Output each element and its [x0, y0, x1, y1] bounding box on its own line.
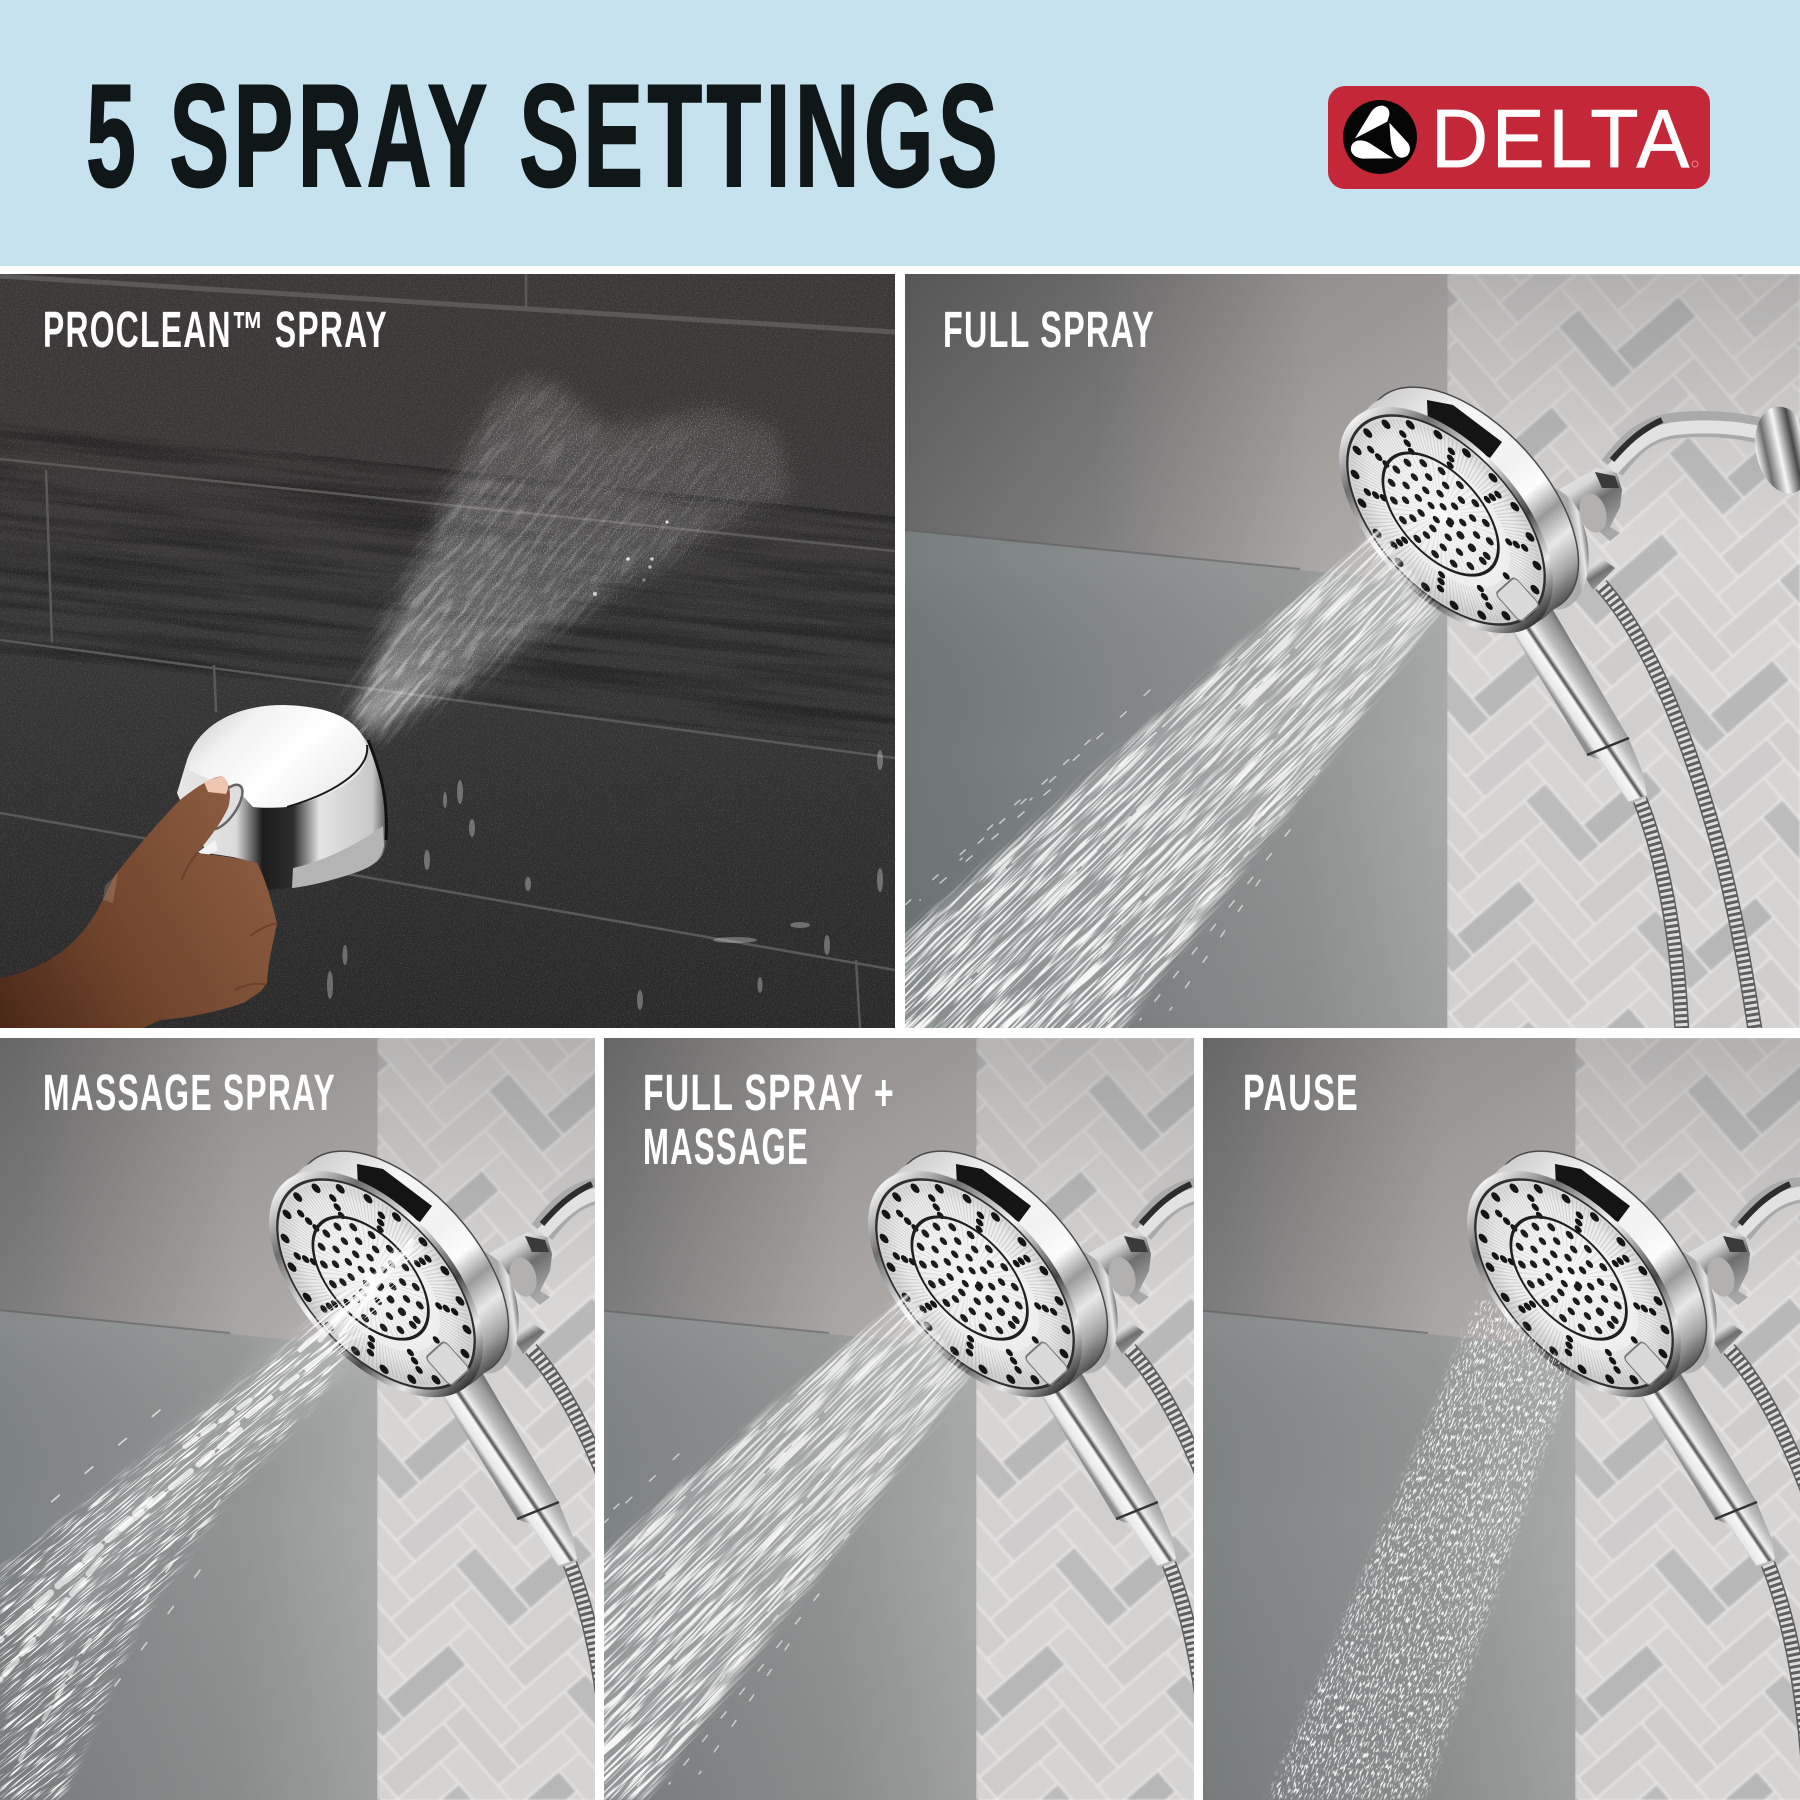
spray: massage jet — [0, 1234, 428, 1800]
logo: Delta: DELTA — [1431, 92, 1693, 185]
icon: shower head and hose — [1299, 349, 1800, 1036]
panel: pause — [1033, 1038, 1800, 1800]
panel: full spray — [905, 274, 1800, 1028]
label: full spray + massage: MASSAGE — [643, 1118, 809, 1175]
panel: ProClean spray — [0, 274, 895, 1028]
panel: massage spray — [0, 1038, 595, 1800]
icon: hand pressing button — [0, 776, 277, 1028]
icon: handheld shower head — [177, 705, 386, 890]
spray: full spray plus massage — [313, 1284, 1169, 1800]
spray: ProClean mist — [340, 370, 800, 747]
label: massage spray: MASSAGE SPRAY — [43, 1064, 336, 1121]
photo: shower scene — [0, 1038, 595, 1800]
photo: shower scene — [1033, 1038, 1800, 1800]
label: full spray + massage — [643, 1064, 895, 1175]
panel: full spray + massage — [604, 1038, 1194, 1800]
title: 5 SPRAY SETTINGS — [86, 54, 1002, 217]
icon: shower head and hose — [269, 1150, 595, 1694]
spray: full spray — [905, 529, 1443, 1028]
label: full spray: FULL SPRAY — [943, 301, 1155, 358]
photo: shower scene — [905, 274, 1800, 1036]
label: ProClean spray: PROCLEAN™ SPRAY — [43, 301, 388, 358]
spray: pause trickle — [1247, 1290, 1633, 1800]
logo: Delta — [1328, 86, 1710, 189]
label: pause: PAUSE — [1243, 1064, 1359, 1121]
label: full spray + massage: FULL SPRAY + — [643, 1064, 895, 1121]
header banner — [0, 0, 1800, 266]
icon: shower head and hose — [1427, 1113, 1800, 1800]
photo: shower scene — [604, 1038, 1194, 1800]
icon: shower head and hose — [758, 1150, 1194, 1694]
